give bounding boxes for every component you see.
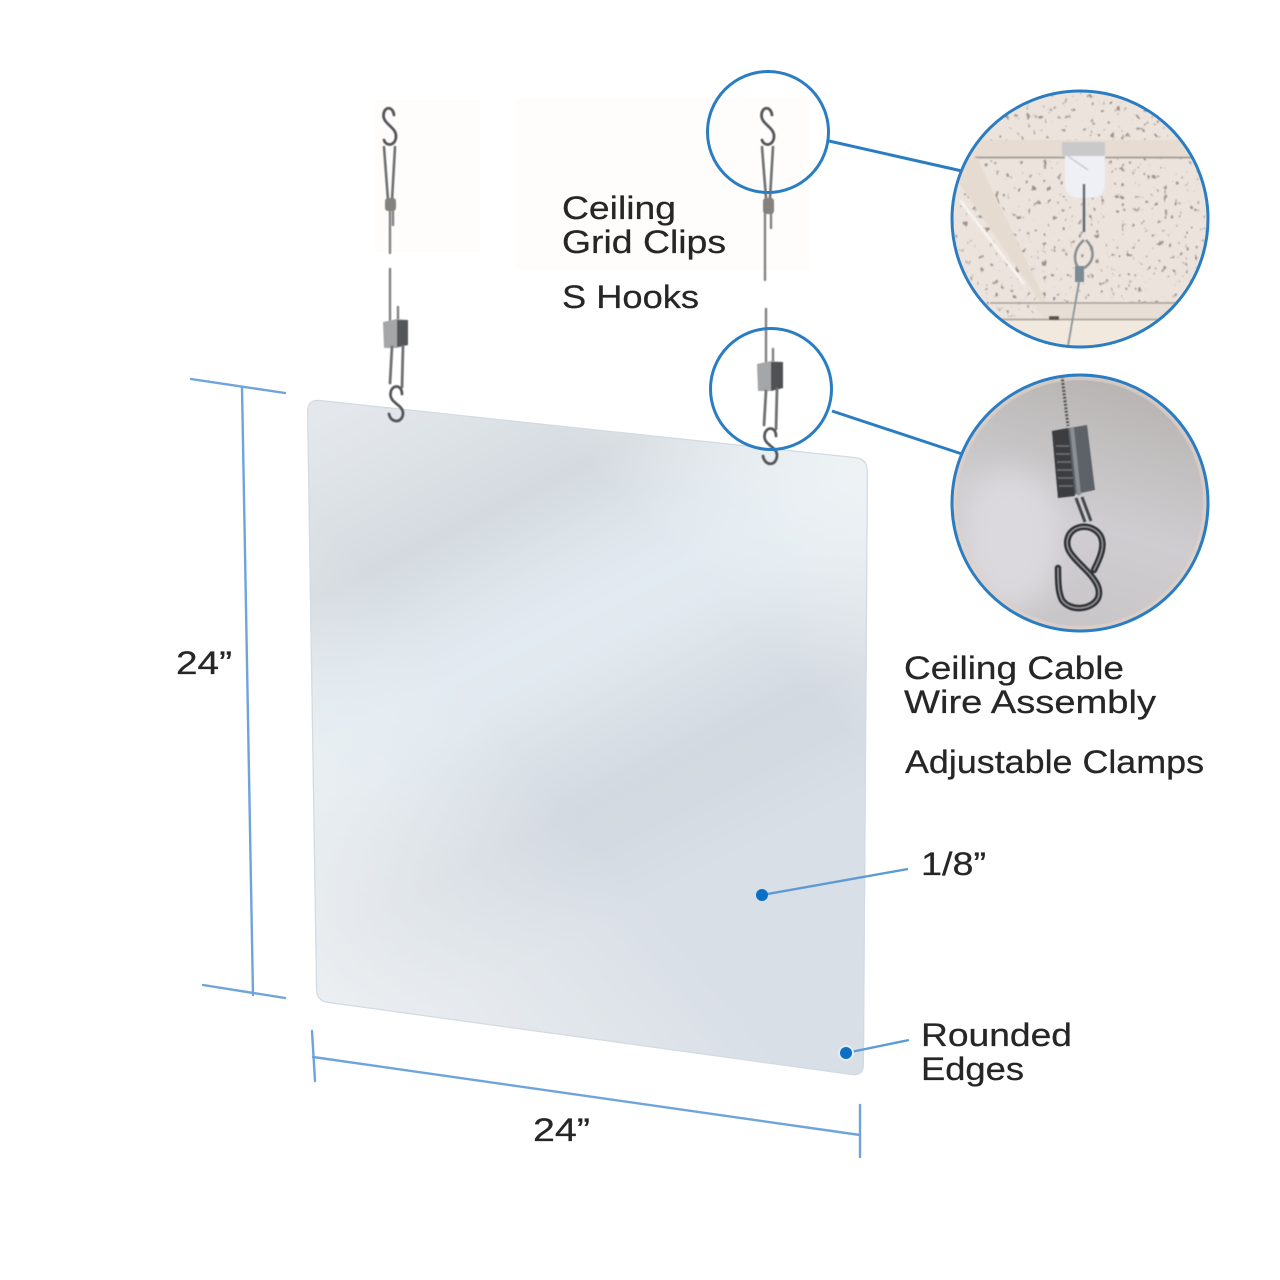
rounded edges callout marker [838, 1040, 909, 1061]
thickness callout marker [756, 869, 908, 901]
panel lower-left highlight [314, 809, 588, 1036]
S hook photo border [952, 375, 1208, 631]
right upper wire [765, 212, 771, 280]
ceiling tile speckles [954, 92, 1206, 318]
acrylic panel [300, 390, 880, 1090]
label: rounded edges: Rounded [921, 1017, 1072, 1053]
right clamp [757, 361, 783, 391]
ceiling clip photo border [952, 91, 1208, 347]
left lower wire [390, 269, 398, 320]
left hanging wire assembly [383, 108, 408, 421]
label: S hooks: S Hooks [562, 279, 699, 315]
photo peach rim [955, 378, 1205, 628]
left lower wire loop [390, 346, 403, 387]
right hanging wire assembly [757, 108, 783, 464]
photo light patch [960, 470, 1060, 610]
leader: bottom detail to hook photo [832, 411, 962, 454]
top detail circle [708, 72, 828, 192]
label: ceiling cable wire assembly: Ceiling Cable [904, 650, 1124, 686]
label: ceiling grid clips: Ceiling [562, 190, 676, 226]
right top S hook [761, 108, 774, 145]
panel upper-right highlight [672, 439, 866, 646]
height dimension line [191, 379, 285, 998]
photo clamp [1052, 425, 1095, 498]
photo S hook [1058, 527, 1102, 608]
label: height: 24” [176, 645, 232, 681]
label: thickness: 1/8” [921, 846, 986, 882]
right ferrule [763, 198, 774, 214]
label: width: 24” [533, 1112, 590, 1148]
right lower wire loop [764, 389, 777, 429]
left upper wire [390, 210, 393, 253]
photo hook wires [1076, 497, 1091, 522]
label: ceiling grid clips [562, 190, 726, 260]
label: ceiling grid clips: Grid Clips [562, 224, 726, 260]
label: ceiling cable wire assembly [904, 650, 1156, 720]
label: adjustable clamps: Adjustable Clamps [905, 744, 1204, 780]
right upper wire loop [762, 147, 773, 198]
right bottom S hook [763, 428, 777, 464]
clip bracket [1062, 142, 1105, 198]
left upper wire loop [384, 147, 395, 200]
grid beams [959, 140, 1192, 346]
width dimension line [312, 1031, 860, 1157]
label: rounded edges [921, 1017, 1072, 1087]
S hook photo [950, 372, 1210, 634]
label: ceiling cable wire assembly: Wire Assembly [904, 684, 1156, 720]
ceiling clip photo [950, 88, 1210, 350]
photo cable [1062, 376, 1068, 426]
label: rounded edges: Edges [921, 1051, 1024, 1087]
left bottom S hook [389, 386, 403, 421]
leader: top detail to ceiling photo [829, 141, 962, 171]
photo cable and hook [1068, 184, 1093, 346]
left clamp [383, 319, 408, 348]
right lower wire [766, 309, 773, 362]
left top S hook [383, 108, 396, 145]
left ferrule [385, 198, 396, 211]
bottom detail circle [710, 328, 832, 450]
